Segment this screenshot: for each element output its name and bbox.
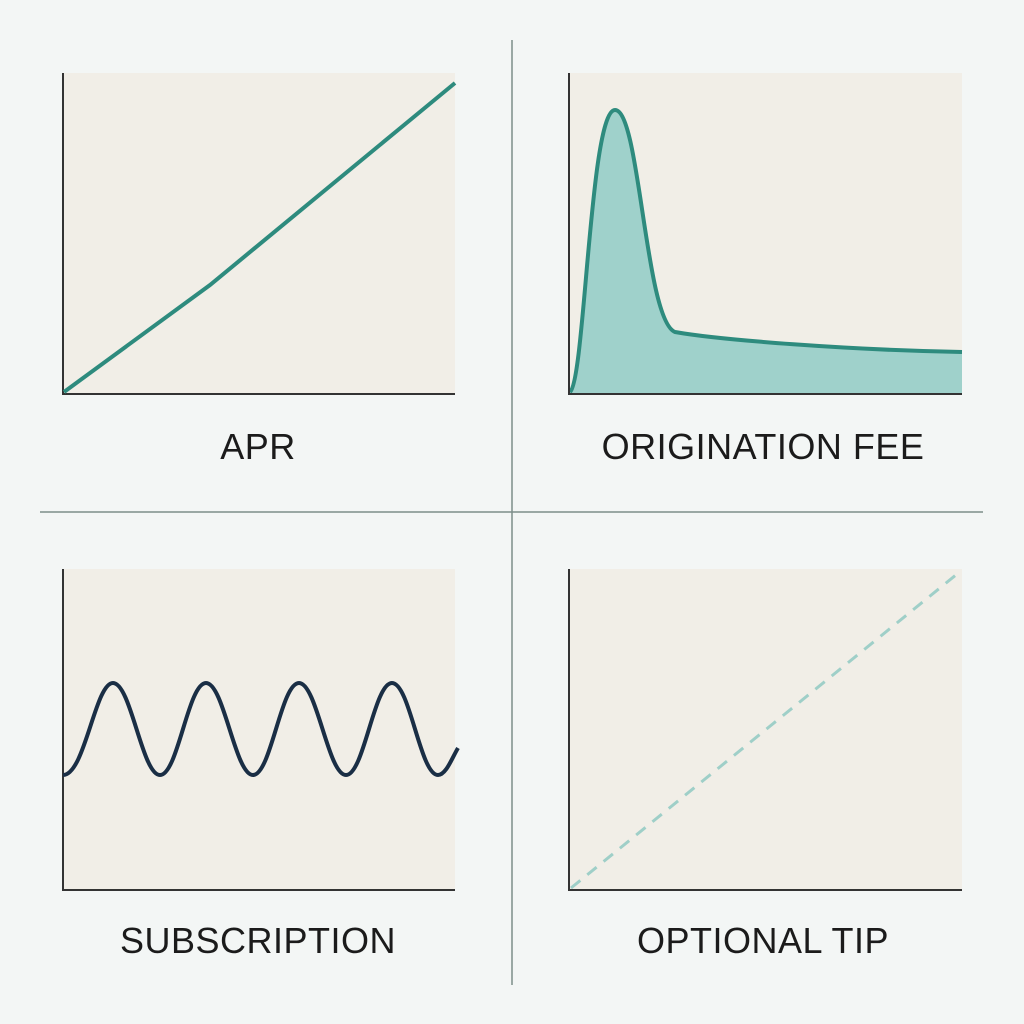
- panel: optional tip chart: [569, 569, 962, 890]
- panel: subscription chart: [63, 569, 458, 890]
- label: optional tip: OPTIONAL TIP: [637, 920, 889, 961]
- label: origination fee: ORIGINATION FEE: [602, 426, 924, 467]
- label: subscription: SUBSCRIPTION: [120, 920, 396, 961]
- label: APR: APR: [220, 426, 296, 467]
- panel: APR chart: [63, 73, 455, 394]
- panel: origination fee chart: [569, 73, 962, 394]
